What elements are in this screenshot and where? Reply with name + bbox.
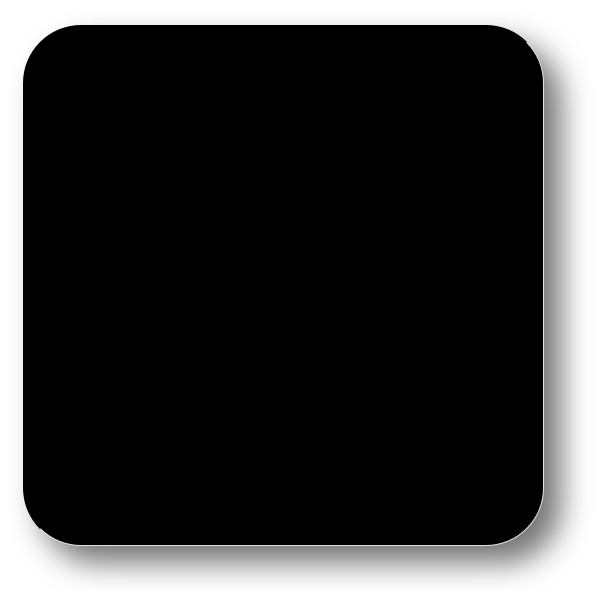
- panel: black rounded square with drop shadow: [23, 25, 544, 546]
